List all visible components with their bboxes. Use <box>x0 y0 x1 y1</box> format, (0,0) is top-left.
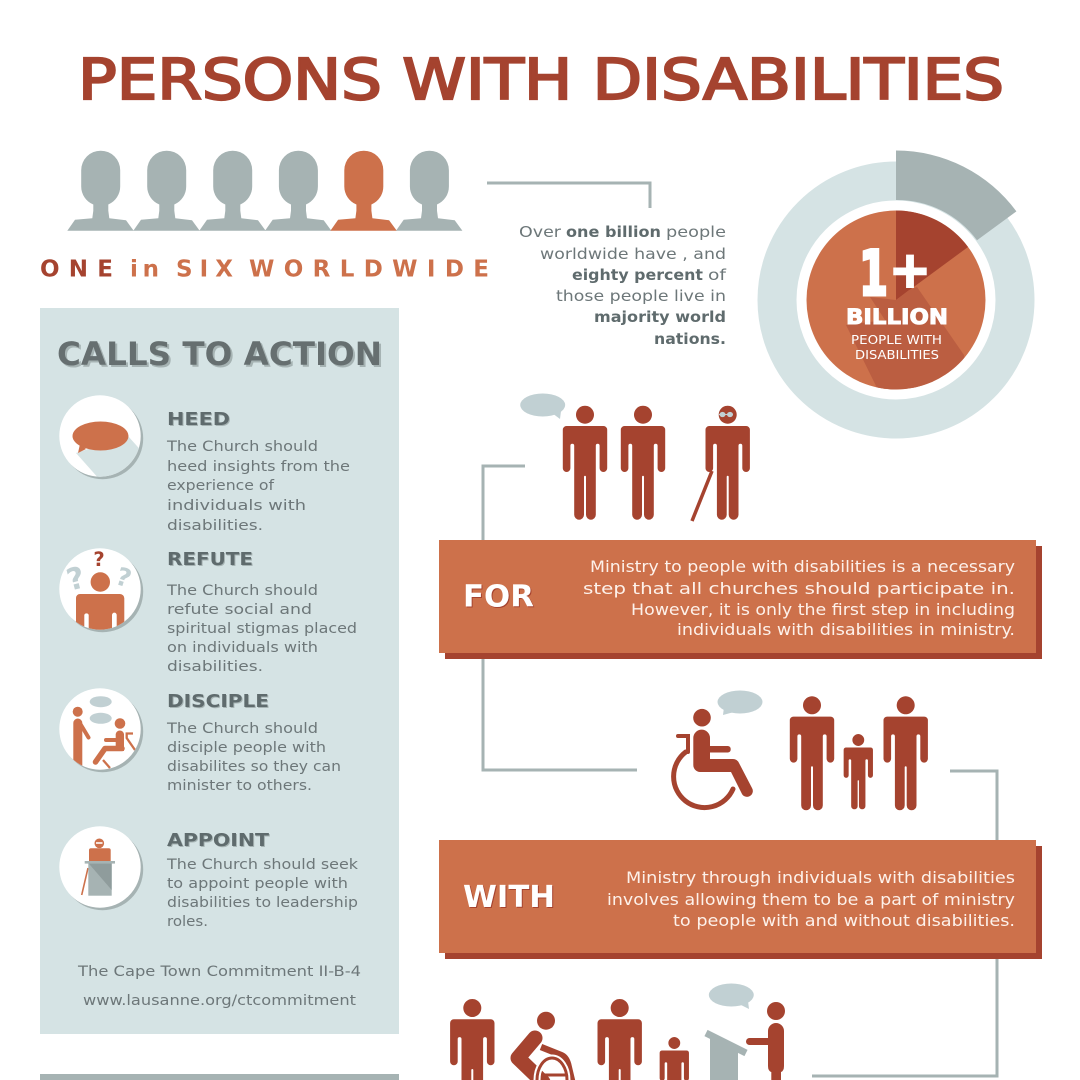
text: appoint: roles. <box>167 914 208 930</box>
one in six caption: ONE <box>40 256 113 282</box>
icon group: three standing people <box>520 394 750 521</box>
one in six caption: in <box>130 256 159 282</box>
icon: refute <box>59 548 143 640</box>
statistic paragraph <box>519 223 727 348</box>
donut chart: 1 <box>859 237 888 310</box>
source references: The Cape Town Commitment II-B-4 <box>77 964 361 980</box>
panel: FOR <box>439 540 1042 659</box>
panel: FOR: individuals with disabilities in ministry. <box>677 620 1015 639</box>
panel: FOR: However, it is only the first step in including <box>631 600 1015 619</box>
icon: appoint <box>59 826 143 910</box>
panel: next section cut off <box>40 1074 399 1080</box>
source references <box>77 964 361 1009</box>
text: heed: disabilities. <box>167 518 263 534</box>
text: heed: experience of <box>167 478 275 494</box>
text: refute: disabilities. <box>167 659 263 675</box>
text: disciple: disciple people with <box>167 740 326 756</box>
panel: WITH: involves allowing them to be a part of ministry <box>607 890 1015 909</box>
statistic paragraph: worldwide have , and <box>540 245 726 263</box>
panel: FOR: step that all churches should participate in. <box>583 579 1015 598</box>
text: heed: HEED <box>167 409 230 430</box>
donut chart: DISABILITIES <box>855 348 939 362</box>
icon group: ministry by people with disabilities <box>450 984 785 1080</box>
statistic paragraph: one billion <box>566 223 661 241</box>
title: PERSONS WITH DISABILITIES <box>78 48 1004 113</box>
text: refute: spiritual stigmas placed <box>167 621 357 637</box>
text: disciple: DISCIPLE <box>167 691 269 712</box>
one in six caption <box>40 256 489 282</box>
text: disciple <box>166 691 341 794</box>
source references: www.lausanne.org/ctcommitment <box>83 993 356 1009</box>
icon: refute: ? <box>63 560 89 599</box>
text: refute: on individuals with <box>167 640 318 656</box>
panel: WITH: to people with and without disabilities. <box>673 911 1015 930</box>
icon: refute: ? <box>93 548 105 571</box>
statistic paragraph: Over <box>519 223 562 241</box>
connector lines <box>483 183 997 1076</box>
text: appoint: to appoint people with <box>167 876 348 892</box>
donut chart: + <box>889 241 931 299</box>
donut chart <box>777 150 1016 419</box>
panel: WITH <box>439 840 1042 959</box>
text: appoint: disabilities to leadership <box>167 895 358 911</box>
statistic paragraph: people <box>666 223 726 241</box>
panel: FOR: Ministry to people with disabilities is a necessary <box>590 557 1015 576</box>
heading: calls to action: CALLS TO ACTION <box>57 335 382 373</box>
text: refute: refute social and <box>167 602 312 618</box>
statistic paragraph: nations. <box>654 330 726 348</box>
icon: refute: ? <box>112 561 135 594</box>
text: disciple: minister to others. <box>167 778 312 794</box>
statistic paragraph: majority world <box>594 308 726 326</box>
panel: calls to action <box>40 308 399 1034</box>
text: heed: individuals with <box>167 498 306 514</box>
text: appoint: The Church should seek <box>166 857 359 873</box>
text: appoint <box>166 830 359 930</box>
icon: disciple <box>59 688 143 775</box>
one in six caption: SIX <box>176 256 233 282</box>
icon group: wheelchair user and family <box>674 690 928 810</box>
text: heed: The Church should <box>166 439 318 455</box>
text: refute: REFUTE <box>167 549 253 570</box>
statistic paragraph: those people live in <box>556 287 726 305</box>
text: refute <box>166 549 357 675</box>
text: disciple: disabilites so they can <box>167 759 341 775</box>
one in six caption: WORLDWIDE <box>249 256 489 282</box>
text: appoint: APPOINT <box>167 830 270 851</box>
text: heed: heed insights from the <box>167 459 350 475</box>
text: disciple: The Church should <box>166 721 318 737</box>
panel: WITH: Ministry through individuals with disabilities <box>626 868 1015 887</box>
text: refute: The Church should <box>166 583 318 599</box>
one in six silhouettes <box>67 151 462 231</box>
panel: FOR: FOR <box>463 580 534 614</box>
statistic paragraph: of <box>708 266 727 284</box>
donut chart: BILLION <box>846 305 948 330</box>
text: heed <box>166 409 350 534</box>
icon: heed <box>59 395 145 480</box>
donut chart: PEOPLE WITH <box>851 333 942 347</box>
panel: WITH: WITH <box>463 880 555 915</box>
statistic paragraph: eighty percent <box>572 266 704 284</box>
